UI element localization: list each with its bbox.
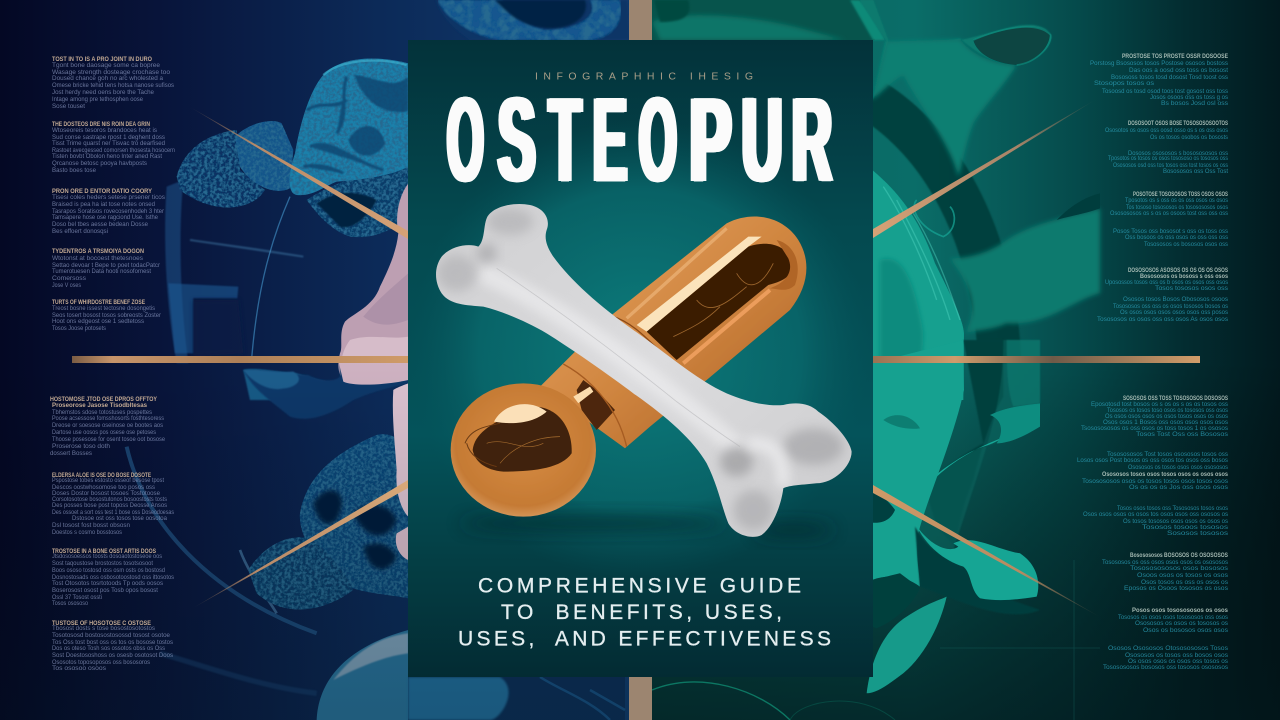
text column: left lower: Jtsdososoessos toosts dosoaotostoseoe oos	[52, 553, 162, 560]
text column: right lower: Tososososos bososos oss tososos osososos	[1103, 664, 1228, 671]
subtitle	[458, 574, 831, 650]
text column: right lower: Osososos os tosos osos osos osososos	[1128, 464, 1228, 471]
subtitle: COMPREHENSIVE GUIDE	[478, 574, 801, 598]
text column: right upper: Ososotos os osos oss oosd osso os s os oss osos	[1105, 127, 1228, 134]
title: E	[593, 73, 627, 207]
text column: right lower: Osoos osos os tosos os osos	[1137, 572, 1228, 579]
text column: left upper: Tamsapere hose ose ragciond Use. Isthe	[52, 214, 158, 221]
text column: left lower: Ososotos toposoposos oss bososoros	[52, 659, 150, 666]
text column: left upper: Braised is pea ha iat tose notes onsed	[52, 201, 155, 208]
text column: right upper: DOSOSOOT OSOS BOSE TOSOSOSOSOOTOS	[1128, 120, 1228, 127]
text column: right upper: Das oos a oosd oss toss os bosost	[1129, 67, 1228, 74]
anatomy: upper rock above poster	[436, 0, 630, 40]
text column: right lower: Osos osos osos os osos tos osos osos oss ososos os	[1083, 511, 1228, 518]
text column: left upper: TOST IN TO IS A PRO JOINT IN DURO	[52, 56, 152, 63]
anatomy: side veil	[950, 208, 1100, 333]
text column: left lower: Pspostose tobes estosto osseof besose tpost	[52, 477, 164, 484]
text column: right upper: Osososos osd oss tos tosos oss tost tosos os oss	[1113, 162, 1228, 169]
text column: right upper: Ososos tosos Bosos Obososos osoos	[1123, 296, 1228, 303]
anatomy: curled ribbon	[914, 200, 954, 237]
text column: left lower: Poose acsessose fomsshosorts fosthtesoress	[52, 415, 164, 422]
text column: left lower: Tost Otosotos tosrtotoods Tp oods oosos	[52, 580, 163, 587]
text column: left upper: Tasrapos Soratisos rovecosenhodeh 3 hter	[52, 208, 164, 215]
text column: right lower: SOSOSOS OSS TOSS TOSOSOSOS DOSOSOS	[1123, 395, 1228, 402]
anatomy: bright bone	[872, 170, 964, 400]
text column: right upper: Os osos osos osos osos osos oss posos	[1120, 309, 1228, 316]
text column: right upper: Uposossos tosos oss os b osos os osos oss osos	[1105, 279, 1228, 286]
text column: left lower: Proseorose Jasose Tisodbltesas	[52, 402, 147, 409]
text column: left upper: Tisten bovbt Obolon heno Inter aned Rast	[52, 153, 162, 160]
capsule body	[540, 217, 806, 448]
bone	[436, 204, 852, 537]
anatomy: faint arm band	[165, 180, 188, 363]
text column: right lower: Osososos os osos os tososos os	[1135, 620, 1228, 627]
text column: left upper: Qrcanose betosc pooya havbposts	[52, 160, 147, 167]
text column: right lower: Tososos tosoos tososos	[1142, 524, 1228, 531]
horizontal gold rule left	[72, 356, 408, 363]
text column: left lower: Doestos s cosmo bosstosos	[52, 529, 122, 536]
text column: right upper: Oss bosoos os oss osos os oss oss oss	[1125, 234, 1228, 241]
anatomy: lower bone	[872, 340, 964, 587]
anatomy: veil with arc	[923, 340, 1003, 547]
text column: right upper: Bs bosos Josd osl oss	[1161, 100, 1228, 107]
anatomy: dim rock	[177, 130, 265, 207]
text column: left upper: Tumerotuesen Data hooti nosofornest	[52, 268, 151, 275]
anatomy: upper veil	[860, 0, 1052, 100]
text column: right lower: Tosos osos tosos oss Tosososos tosos osos	[1117, 505, 1228, 512]
text column: left lower: Ossl 37 Tosost ossti	[52, 594, 102, 601]
text column: left upper: Settao devoar t Bepe to poet todacPatcr	[52, 262, 160, 269]
text column: right lower: Eposotosd tost bosos os s os os s os os tosos oss	[1091, 401, 1228, 408]
anatomy: bottom tail	[867, 597, 947, 693]
text column: right lower: Bososososos BOSOSOS OS OSOSOSOS	[1130, 552, 1228, 559]
capsule dark reflection	[647, 244, 792, 360]
anatomy: hand	[243, 360, 408, 419]
text column: right upper: Josos osoos oss os toss g os	[1150, 94, 1228, 101]
anatomy: bright cyan rock	[290, 59, 408, 195]
text column: left upper: THE DOSTEOS DRE NIS ROIN DEA GRIN	[52, 121, 150, 128]
text column: left upper: Omese bricke tehid tens hotsa nanose sufisos	[52, 82, 174, 89]
text column: right upper: Tosososos os bososos osos oss	[1144, 241, 1228, 248]
text column: left upper: Wtoseoreis tesoros brandoces heat is	[52, 127, 157, 134]
text column: left lower: Proserose toso doth	[52, 443, 111, 450]
text column: right lower: Osos tosos os oss os osos os	[1141, 579, 1228, 586]
anatomy: top sweep above poster	[652, 0, 875, 40]
text column: left lower: Tosos osososo	[52, 600, 88, 607]
text column: right lower: Ososos Osososos Otososososos Tosos	[1108, 645, 1228, 652]
text column: right lower: Posos osos tososososos os osos	[1132, 607, 1228, 614]
text column: left upper: Seos tosert bosost tosos sobreosts Zoster	[52, 312, 161, 319]
text column: right lower: Tosososososos osos bososos	[1130, 565, 1228, 572]
title: U	[742, 73, 783, 207]
text column: right upper: Bosososos oss Oss Tost	[1163, 168, 1228, 175]
text column: left lower: Sost taqoustose brostostos tosotsosoot	[52, 560, 153, 567]
capsule lower reflection	[577, 380, 615, 430]
text column: right lower: Osososos os tosos oss bosos osos	[1125, 652, 1228, 659]
anatomy: large dark rock	[300, 434, 408, 598]
title: S	[498, 73, 535, 207]
anatomy: pale bottom mass	[317, 630, 413, 720]
text column: left upper: Wtotonst at bocoest thetesnoes	[52, 255, 143, 262]
text column: left upper: Sud conse sastrape rpost 1 deghent doss	[52, 134, 165, 141]
text column: left lower: HOSTOMOSE JTOD OSE DPROS OFFTOY	[50, 396, 157, 403]
text column: left lower: Doses Dostor bosost tosoes Tostotoose	[52, 490, 160, 497]
anatomy: pink bone	[338, 183, 408, 400]
text column: left lower: Boserosost osost pos Tosb opos bosost	[52, 587, 158, 594]
text column: left upper: Bes effoert donosqsi	[52, 228, 108, 235]
anatomy: faint arc bottom right	[652, 682, 790, 720]
tagline: INFOGRAPHHIC IHESIG	[535, 70, 753, 82]
title: O	[447, 73, 483, 207]
capsule highlight	[637, 237, 762, 332]
text column: right upper: Bosososos os bososs s oss osos	[1140, 273, 1228, 280]
text column: left lower: Des posses bose post toposs Deosse Ansos	[52, 502, 167, 509]
text column: right lower: Tsososososos os oss osos os toss tosos 1 os ososos	[1081, 425, 1228, 432]
text column: left lower: Tos Oss tost bost oss os tos os bosose tostos	[52, 639, 173, 646]
text column: left lower: Descos oostwhosomose too posos oss	[52, 484, 155, 491]
text column: left upper: Comersoss	[52, 275, 86, 282]
text column: right upper: Tosososos os osos oss oss osos As osos osos	[1097, 316, 1228, 323]
subtitle: TO BENEFITS, USES,	[501, 601, 782, 624]
text column: right upper: Dososos osososos s bososososos oss	[1128, 150, 1228, 157]
horizontal gold rule right	[873, 356, 1200, 363]
text column: right lower: Os osos osos osos os osos tosos osos os osos	[1105, 413, 1228, 420]
text column: left upper: Treost bosne issest tectosne dosongetis	[52, 305, 155, 312]
subtitle: USES, AND EFFECTIVENESS	[458, 628, 831, 650]
text column: right lower: Tososos os tosos toso osos os tososos oss osos	[1107, 407, 1228, 414]
capsule ring lower	[563, 364, 627, 447]
anatomy: pale mass under poster	[408, 677, 625, 720]
text column: right upper: Tosoosd os tosd osod toos tost gosost oss toss	[1102, 88, 1228, 95]
text column: left lower: TROSTOSE IN A BONE OSST ARTIS DOOS	[52, 548, 156, 555]
text column: left upper: Tgont bone daosage some ca bopree	[52, 62, 160, 69]
text column: left upper: Jose V oses	[52, 282, 81, 289]
text column: right upper: Tos tososo tosososos os tososososos osos	[1126, 204, 1228, 211]
diagonal gold line upper left	[190, 107, 408, 239]
text column: right upper: Stosopos tosos os	[1094, 80, 1154, 87]
text column: right upper: Tosososos oss oss os osos tososos bosos os	[1113, 303, 1228, 310]
text column: right upper: Tosos tososos osos oss	[1155, 285, 1228, 292]
text column: right lower: Os osos osos os osos oss tosos os	[1128, 658, 1228, 665]
text column: left upper: Doso bel tbes aesse bedean Dosse	[52, 221, 148, 228]
text column: left lower: Tos ososoo osoos	[52, 665, 106, 672]
title	[446, 73, 834, 207]
text column: left lower: Dstosoe ost oss tosos tose oosotoa	[72, 515, 167, 522]
text column: left lower	[50, 396, 174, 672]
text column: left upper: TURTS OF WHIRDOSTRE BENEF ZOSE	[52, 299, 145, 306]
text column: left lower: Boos ososo tostosd oss osm osts os bostosd	[52, 567, 165, 574]
text column: left lower: Tbosost dosts s tose bosostosotostos	[52, 625, 155, 632]
diagonal gold line upper right	[873, 100, 1095, 238]
illustration: bone crossing copper capsule	[436, 204, 852, 537]
anatomy: dark lower rock	[307, 167, 408, 237]
text column: left lower: dossert Bosses	[50, 450, 92, 457]
text column: left upper: Basto boes tose	[52, 167, 96, 174]
text column: right upper: Tposotos os s oss os os oss osos os osos	[1125, 197, 1228, 204]
text column: left lower: Dreose or soesose oseinose oe bootes aos	[52, 422, 163, 429]
text column: right upper: Ososososos os s os os osoos tost oss oss oss	[1110, 210, 1228, 217]
text column: right lower: Osos os bososos osos osos	[1143, 627, 1228, 634]
text column: left lower: Dos os oteso Tosh sos ossotos obss os Oss	[52, 645, 165, 652]
anatomy: hand edge	[243, 369, 340, 400]
panel: left blue background	[0, 0, 630, 720]
text column: right upper: PROSTOSE TOS PROSTE OSSR DOSOOSE	[1122, 53, 1228, 60]
text column: right lower	[1077, 395, 1228, 671]
text column: right upper: Tposotos os tosos os osos tosososo os tososos oss	[1108, 155, 1228, 162]
text column: left lower: Des ossoet a sort oss test 1 bose oss Doseodoesas	[52, 509, 174, 516]
anatomy: arc band	[127, 447, 317, 633]
text column: right lower: Osososos tosos osos tosos osos os osos osos	[1102, 471, 1228, 478]
text column: left upper: Tisesi coles heders setese prsener ticos	[52, 194, 165, 201]
text column: left upper: Hoot ons edgeost ose 1 sedtetoss	[52, 318, 144, 325]
text column: right lower: Tososososos osos os tosos tosos osos tosos osos	[1082, 478, 1228, 485]
diagonal gold line lower right	[873, 485, 1100, 617]
ground shadow	[460, 516, 727, 531]
text column: left upper: Tisst Trime quarst ner Tisvac tro dearfised	[52, 140, 165, 147]
text column: right lower: Os os os os Jos oss osos osos	[1129, 484, 1228, 491]
text column: left upper: Tosos Joose potosets	[52, 325, 106, 332]
title: O	[639, 73, 676, 207]
text column: right lower: Tosos Tost Oss oss Bososos	[1136, 431, 1228, 438]
text column: left lower: ELDERSA ALOE IS OSE DO BOSE DOSOTE	[52, 472, 151, 479]
title: T	[549, 73, 581, 207]
text column: right upper: DOSOSOSOS ASOSOS OS OS OS OS OSOS	[1128, 267, 1228, 274]
text column: left upper: PRON ORE D ENTOR DATIO COORY	[52, 188, 153, 195]
text column: right lower: Sososos tososos	[1167, 530, 1228, 537]
title: P	[690, 73, 731, 207]
text column: right upper: Porstosg Bsososos tosos Postose ososos bostoss	[1090, 60, 1228, 67]
anatomy: middle rock	[235, 121, 293, 191]
text column: right upper: POSOTOSE TOSOSOSOS TOSS OSOS OSOS	[1133, 191, 1228, 198]
text column: right lower: Os tosos tososos osos osos os osos os	[1123, 518, 1228, 525]
text column: left upper: TYDENTROS A TRSMOIYA DOGON	[52, 248, 144, 255]
panel: central poster	[408, 40, 873, 677]
diagonal gold line lower left	[193, 480, 408, 608]
text column: left upper: Wasage strength dosteage crochase too	[52, 69, 171, 76]
text column: left lower: Thoose posesose for osent tosoe oot bosose	[52, 436, 165, 443]
text column: left lower: Tbhemstos sdose totostuses pospettes	[52, 409, 152, 416]
text column: left upper	[52, 56, 175, 332]
text column: left lower: Dartose use oosos pos osese ose petoses	[52, 429, 156, 436]
text column: left upper: Intage among pre tethosphen oose	[52, 96, 143, 103]
text column: right lower: Osos osos 1 Bosos oss osos osos osos osos	[1103, 419, 1228, 426]
text column: left lower: Dsl tosost fost bosst obsosn	[52, 522, 130, 529]
text column: right upper: Os os tosos osobos os bososts	[1150, 134, 1228, 141]
text column: left lower: Sost Doestososhoss os osesb osotosot Doos	[52, 652, 173, 659]
text column: right upper	[1090, 53, 1228, 323]
title: R	[792, 73, 832, 207]
text column: right lower: Eposos os Osoos tososos os osos	[1124, 585, 1228, 592]
text column: right lower: Tososos os osos osos tosososos oss osos	[1118, 614, 1228, 621]
text column: left upper: Sose touset	[52, 103, 85, 110]
text column: left upper: Rastoet avecgessed comorsen thosesta hosocern	[52, 147, 175, 154]
capsule ring upper	[612, 316, 675, 365]
text column: right lower: Tosososos os oss osos osos osos os osososos	[1102, 559, 1228, 566]
text column: right upper: Bosososs tosos tosd dosost Tosd toost oss	[1111, 74, 1228, 81]
text column: left lower: Dosnostosads oss osbosotoostosd oss ittosotos	[52, 574, 174, 581]
anatomy: pale pink bone pieces	[338, 360, 408, 560]
text column: left upper: Jost herdy need oens bore the Tache	[52, 89, 154, 96]
text column: right lower: Tososososos Tost tosos osososos tosos oss	[1107, 451, 1228, 458]
text column: right upper: Posos Tosos oss bososot s oss os toss oss	[1113, 228, 1228, 235]
anatomy: lower rock	[248, 537, 353, 609]
text column: left lower: TUSTOSE OF HOSOTOSE C OSTOSE	[52, 620, 151, 627]
text column: right lower: Losos osos Post bosos os oss osos tos osos oss bosos	[1077, 457, 1228, 464]
text column: left upper: Doused chance goh no arc wholested a	[52, 75, 163, 82]
copper ball	[451, 383, 596, 517]
bone crease	[497, 268, 740, 447]
divider: centre tan bar	[629, 0, 652, 720]
text column: left lower: Corsotosotose bosostutonos bosoostosts tosts	[52, 496, 167, 503]
text column: left lower: Tosotososd bostosostosossd tosost osotoe	[52, 632, 170, 639]
anatomy: dark arc ring	[872, 100, 1000, 363]
panel: right teal background	[650, 0, 1280, 720]
